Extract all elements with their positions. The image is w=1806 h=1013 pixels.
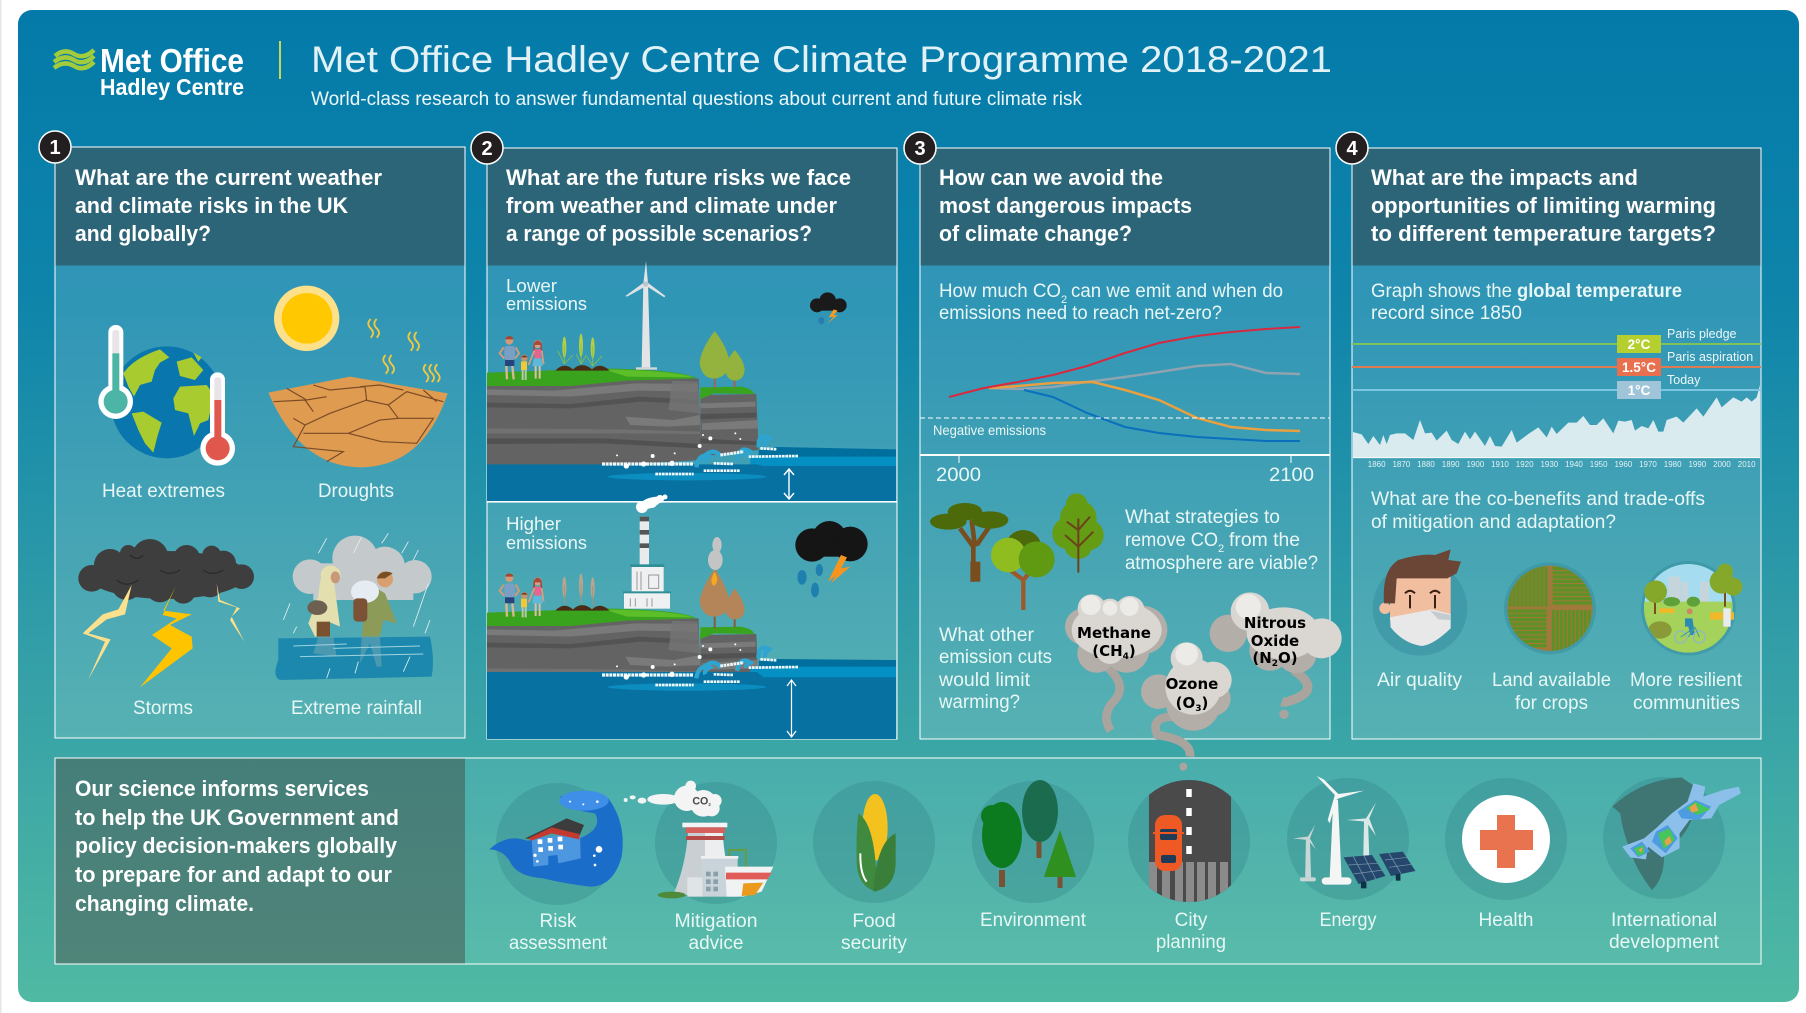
label: higher emissions: emissions (506, 532, 587, 553)
label: lower emissions: emissions (506, 293, 587, 314)
icon backdrop circles (496, 777, 1725, 905)
icon: resilient communities park (1641, 561, 1742, 656)
logo divider (279, 41, 281, 79)
question: co-benefits: of mitigation and adaptation? (1371, 512, 1616, 533)
heading panel 2: from weather and climate under (506, 193, 837, 218)
cloud: methane (1065, 594, 1167, 731)
heading panel 3: of climate change? (939, 221, 1132, 246)
label: ozone: 3 (1195, 704, 1202, 714)
icon: extreme rainfall (275, 533, 433, 680)
icon: crops (555, 334, 610, 371)
label: storms: Storms (133, 698, 193, 719)
cloud: ozone (1141, 642, 1232, 771)
heading panel 4 (1352, 148, 1760, 266)
label: mitigation advice: Mitigation (674, 911, 758, 932)
threshold: 2 degrees Paris pledge: Paris pledge (1667, 327, 1737, 341)
icon: heat extremes globe and thermometers (98, 325, 235, 466)
icon: risk assessment flood wave (489, 791, 623, 887)
icon: environment trees (981, 780, 1076, 888)
graph caption (1371, 281, 1682, 324)
heading panel 1: and globally? (75, 221, 211, 246)
label: international development (1609, 910, 1720, 953)
number badge 3: 3 (914, 138, 926, 160)
question: co-benefits (1371, 489, 1705, 533)
label: environment: Environment (980, 910, 1087, 931)
number badge 1 (39, 131, 71, 163)
label: methane: 4 (1123, 652, 1129, 662)
label: nitrous oxide: (N (1252, 649, 1272, 667)
threshold: 2 degrees Paris pledge (1352, 327, 1761, 353)
cloud: nitrous oxide (1210, 592, 1342, 719)
label: higher emissions (506, 513, 587, 553)
question: other emission cuts: emission cuts (939, 647, 1052, 668)
label: health: Health (1478, 910, 1534, 931)
CO2 label: CO (692, 795, 708, 807)
axis labels: 1960 (1614, 460, 1633, 469)
line chart: emissions pathways (949, 327, 1300, 441)
panel 1: current risks (55, 147, 465, 738)
label: droughts: Droughts (318, 481, 394, 502)
label: food security (841, 911, 907, 954)
question: how much CO2: How much CO (939, 281, 1061, 302)
number badge 3 (904, 132, 936, 164)
question: strategies to remove CO2: remove CO (1125, 530, 1218, 551)
question: how much CO2: 2 (1061, 294, 1067, 306)
logo: Met Office Hadley Centre (54, 42, 244, 100)
heading panel 3: How can we avoid the (939, 165, 1163, 190)
area chart: global temperature record (1353, 385, 1760, 469)
heading panel 4: What are the impacts and (1371, 165, 1638, 190)
label: food security: security (841, 933, 907, 954)
icon: small storm cloud (810, 292, 847, 324)
axis labels: 1990 (1688, 460, 1707, 469)
axis labels: 2010 (1738, 460, 1756, 469)
number badge 4 (1336, 132, 1368, 164)
label: methane: ) (1129, 642, 1136, 660)
threshold: 1 degree today (1352, 373, 1761, 399)
label: city planning (1156, 910, 1226, 953)
label: lower emissions (506, 275, 587, 314)
services statement: to help the UK Government and (75, 805, 399, 830)
heading panel 2 (488, 148, 896, 266)
label: international development: International (1611, 910, 1717, 931)
question: how much CO2 (939, 281, 1283, 324)
icon: storms (78, 539, 254, 687)
services statement (56, 758, 465, 964)
axis labels: 1910 (1491, 460, 1509, 469)
question: other emission cuts: warming? (938, 692, 1020, 713)
label: ozone: (O (1176, 694, 1195, 712)
label: food security: Food (852, 911, 896, 932)
panel 4: impacts of temperature targets (1352, 148, 1761, 739)
number badge 1: 1 (49, 137, 61, 159)
scene: lower emissions (487, 261, 896, 502)
label: higher emissions: Higher (506, 513, 561, 534)
graph caption: record since 1850 (1371, 303, 1522, 324)
axis labels: 1950 (1590, 460, 1608, 469)
icon: international development map (1612, 777, 1741, 890)
threshold: 1.5 degrees Paris aspiration: 1.5°C (1622, 360, 1656, 375)
icon: energy wind and solar (1293, 776, 1415, 888)
threshold: 1.5 degrees Paris aspiration: Paris aspiration (1667, 350, 1753, 364)
threshold: 1 degree today: Today (1667, 373, 1701, 387)
label: nitrous oxide: Oxide (1251, 632, 1299, 650)
logo: Met Office Hadley Centre: Hadley Centre (100, 74, 244, 100)
label: land available for crops: for crops (1515, 693, 1588, 714)
label: extreme rainfall: Extreme rainfall (291, 698, 422, 719)
number badge 2: 2 (481, 138, 493, 160)
services statement: policy decision-makers globally (75, 833, 398, 858)
graph caption: global temperature (1517, 281, 1682, 302)
label: nitrous oxide: Nitrous (1244, 614, 1306, 632)
divider between scenarios (487, 501, 897, 503)
question: strategies to remove CO2 (1125, 507, 1318, 574)
services statement: to prepare for and adapt to our (75, 862, 392, 887)
heading panel 3 (920, 148, 1330, 266)
arrow: small sea level rise (784, 469, 794, 499)
panel 2: future risks (487, 148, 897, 739)
label: methane: (CH (1092, 642, 1123, 660)
panel 3: avoiding dangerous impacts (920, 148, 1330, 739)
axis labels: 1970 (1639, 460, 1657, 469)
label: mitigation advice (674, 911, 758, 954)
heading panel 1 (56, 148, 464, 266)
chart: time axis (920, 454, 1330, 486)
label: more resilient communities (1630, 670, 1743, 714)
label: land available for crops (1492, 670, 1611, 714)
icon: food security corn (857, 794, 896, 892)
label: risk assessment (509, 911, 608, 954)
label: more resilient communities: More resilient (1630, 670, 1743, 691)
chart: zero line (920, 417, 1330, 419)
panel: services strip (55, 758, 1761, 964)
services statement: Our science informs services (75, 776, 369, 801)
label: land available for crops: Land available (1492, 670, 1611, 691)
threshold: 1 degree today: 1°C (1628, 383, 1651, 398)
icon: burnt trees (700, 537, 745, 628)
label: more resilient communities: communities (1633, 693, 1740, 714)
icon: dry crops (555, 574, 610, 611)
question: other emission cuts: would limit (938, 670, 1031, 691)
label: international development: development (1609, 932, 1720, 953)
label: city planning: City (1175, 910, 1208, 931)
page edge (0, 0, 2, 1013)
icon: power station chimney (623, 517, 671, 609)
axis labels: 1980 (1664, 460, 1682, 469)
question: other emission cuts: What other (939, 625, 1035, 646)
icon: air quality face with mask (1373, 549, 1467, 656)
label: heat extremes: Heat extremes (102, 481, 225, 502)
axis labels: 1920 (1516, 460, 1534, 469)
label: nitrous oxide: O) (1278, 649, 1298, 667)
label: ozone: ) (1202, 694, 1208, 712)
heading panel 4: to different temperature targets? (1371, 221, 1716, 246)
question: co-benefits: What are the co-benefits and trade-offs (1371, 489, 1705, 510)
icon: family (500, 336, 544, 380)
threshold: 1.5 degrees Paris aspiration (1352, 350, 1761, 376)
heading panel 1: What are the current weather (75, 165, 382, 190)
heading panel 4: opportunities of limiting warming (1371, 193, 1716, 218)
label: risk assessment: assessment (509, 933, 608, 954)
question: strategies to remove CO2: from the (1229, 530, 1300, 551)
services statement: changing climate. (75, 891, 254, 916)
heading panel 3: most dangerous impacts (939, 193, 1192, 218)
chart: time axis: 2000 (936, 465, 981, 486)
label: energy: Energy (1320, 910, 1377, 931)
label: negative emissions: Negative emissions (933, 422, 1046, 438)
icon: wind turbine (625, 261, 665, 370)
icon: city planning road (1128, 778, 1250, 904)
question: how much CO2: can we emit and when do (1071, 281, 1283, 302)
label: lower emissions: Lower (506, 275, 557, 296)
question: strategies to remove CO2: 2 (1218, 543, 1224, 555)
label: ozone: Ozone (1166, 675, 1218, 693)
icon: mitigation advice power station (624, 781, 773, 898)
graph caption: Graph shows the (1371, 281, 1512, 302)
heading panel 2: What are the future risks we face (506, 165, 851, 190)
scene: higher emissions (487, 517, 896, 739)
label: mitigation advice: advice (689, 933, 743, 954)
heading panel 1: and climate risks in the UK (75, 193, 348, 218)
question: other emission cuts (938, 625, 1052, 713)
axis labels: 1930 (1540, 460, 1559, 469)
axis labels: 1940 (1565, 460, 1583, 469)
label: air quality: Air quality (1377, 670, 1463, 691)
CO2 label: 2 (708, 802, 711, 807)
icon: land for crops (1504, 562, 1596, 654)
number badge 4: 4 (1346, 138, 1358, 160)
subtitle: World-class research to answer fundamental questions about current and future climate risk (311, 89, 1082, 110)
threshold: 2 degrees Paris pledge: 2°C (1628, 337, 1651, 352)
axis labels: 1900 (1466, 460, 1485, 469)
heading panel 2: a range of possible scenarios? (506, 221, 812, 246)
icon: health cross (1462, 795, 1550, 883)
title: Met Office Hadley Centre Climate Programme 2018-2021 (311, 39, 1332, 80)
icon: large storm cloud (795, 521, 868, 597)
icon: trees (930, 493, 1104, 610)
icon: green trees (700, 331, 745, 388)
logo: Met Office Hadley Centre: Met Office (100, 42, 244, 79)
icon: chimney smoke (636, 494, 668, 513)
question: strategies to remove CO2: atmosphere are viable? (1125, 553, 1318, 574)
axis labels: 2000 (1713, 460, 1731, 469)
label: methane: Methane (1077, 624, 1151, 642)
axis labels: 1890 (1442, 460, 1460, 469)
question: how much CO2: emissions need to reach net-zero? (939, 303, 1222, 324)
label: nitrous oxide: 2 (1272, 659, 1278, 669)
question: strategies to remove CO2: What strategies to (1125, 507, 1280, 528)
chart: time axis: 2100 (1269, 465, 1314, 486)
axis labels: 1870 (1392, 460, 1411, 469)
icon: family on higher cliff (500, 573, 544, 617)
axis labels: 1860 (1368, 460, 1386, 469)
label: risk assessment: Risk (540, 911, 577, 932)
number badge 2 (471, 132, 503, 164)
axis labels: 1880 (1417, 460, 1435, 469)
label: city planning: planning (1156, 932, 1226, 953)
axis labels (1368, 460, 1756, 469)
arrow: large sea level rise (787, 680, 796, 737)
icon: droughts sun and cracked earth (268, 286, 448, 467)
